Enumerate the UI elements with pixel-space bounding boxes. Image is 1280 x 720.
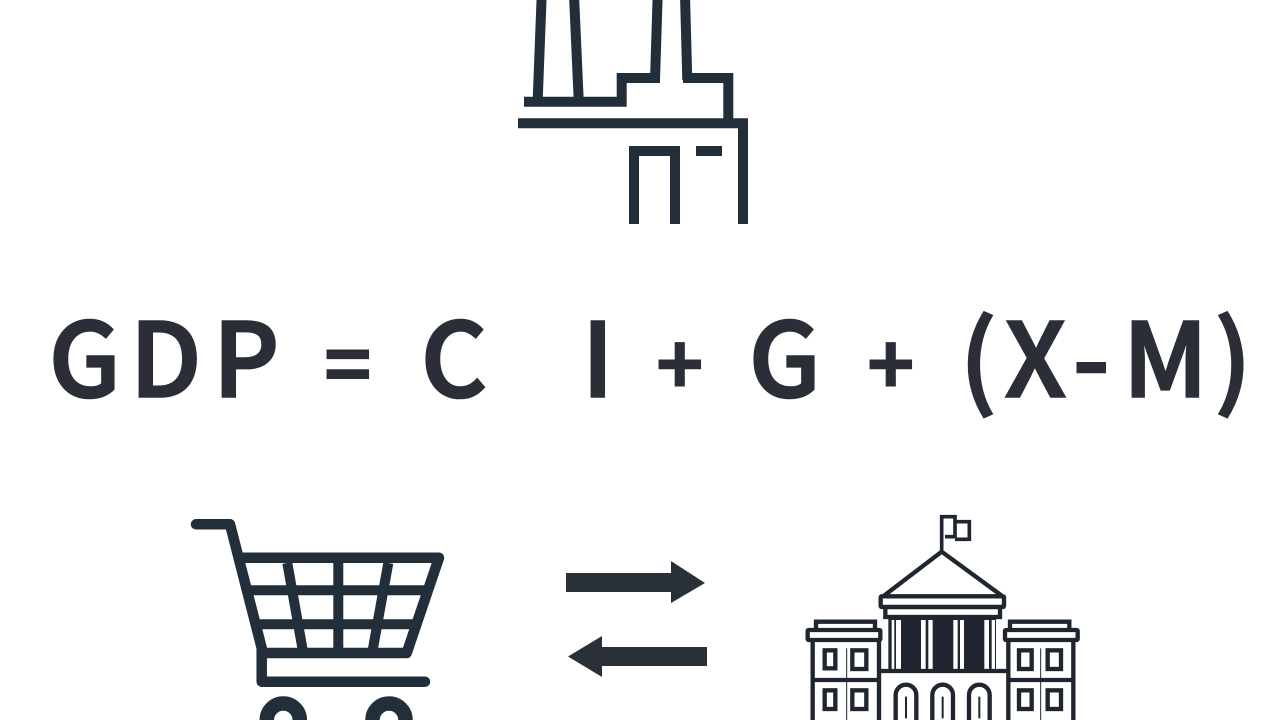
central block with arched windows	[880, 671, 1007, 720]
pediment roof	[884, 552, 1002, 596]
right wing	[1005, 622, 1078, 720]
equation: GDP = C I + G + (X-M): =++	[325, 302, 914, 418]
icon: shopping cart	[196, 524, 439, 720]
left wing	[808, 622, 880, 720]
icon: factory	[518, 0, 743, 224]
cornice	[881, 596, 1004, 607]
icon: cart wheels	[267, 704, 406, 720]
colonnade	[888, 617, 996, 670]
icon: government building	[808, 517, 1078, 720]
equation: GDP = C I + G + (X-M): GDPCIG(X-M)	[49, 280, 1251, 426]
arrow: left	[568, 636, 707, 677]
arrow: right	[566, 561, 705, 603]
flag	[942, 517, 969, 550]
